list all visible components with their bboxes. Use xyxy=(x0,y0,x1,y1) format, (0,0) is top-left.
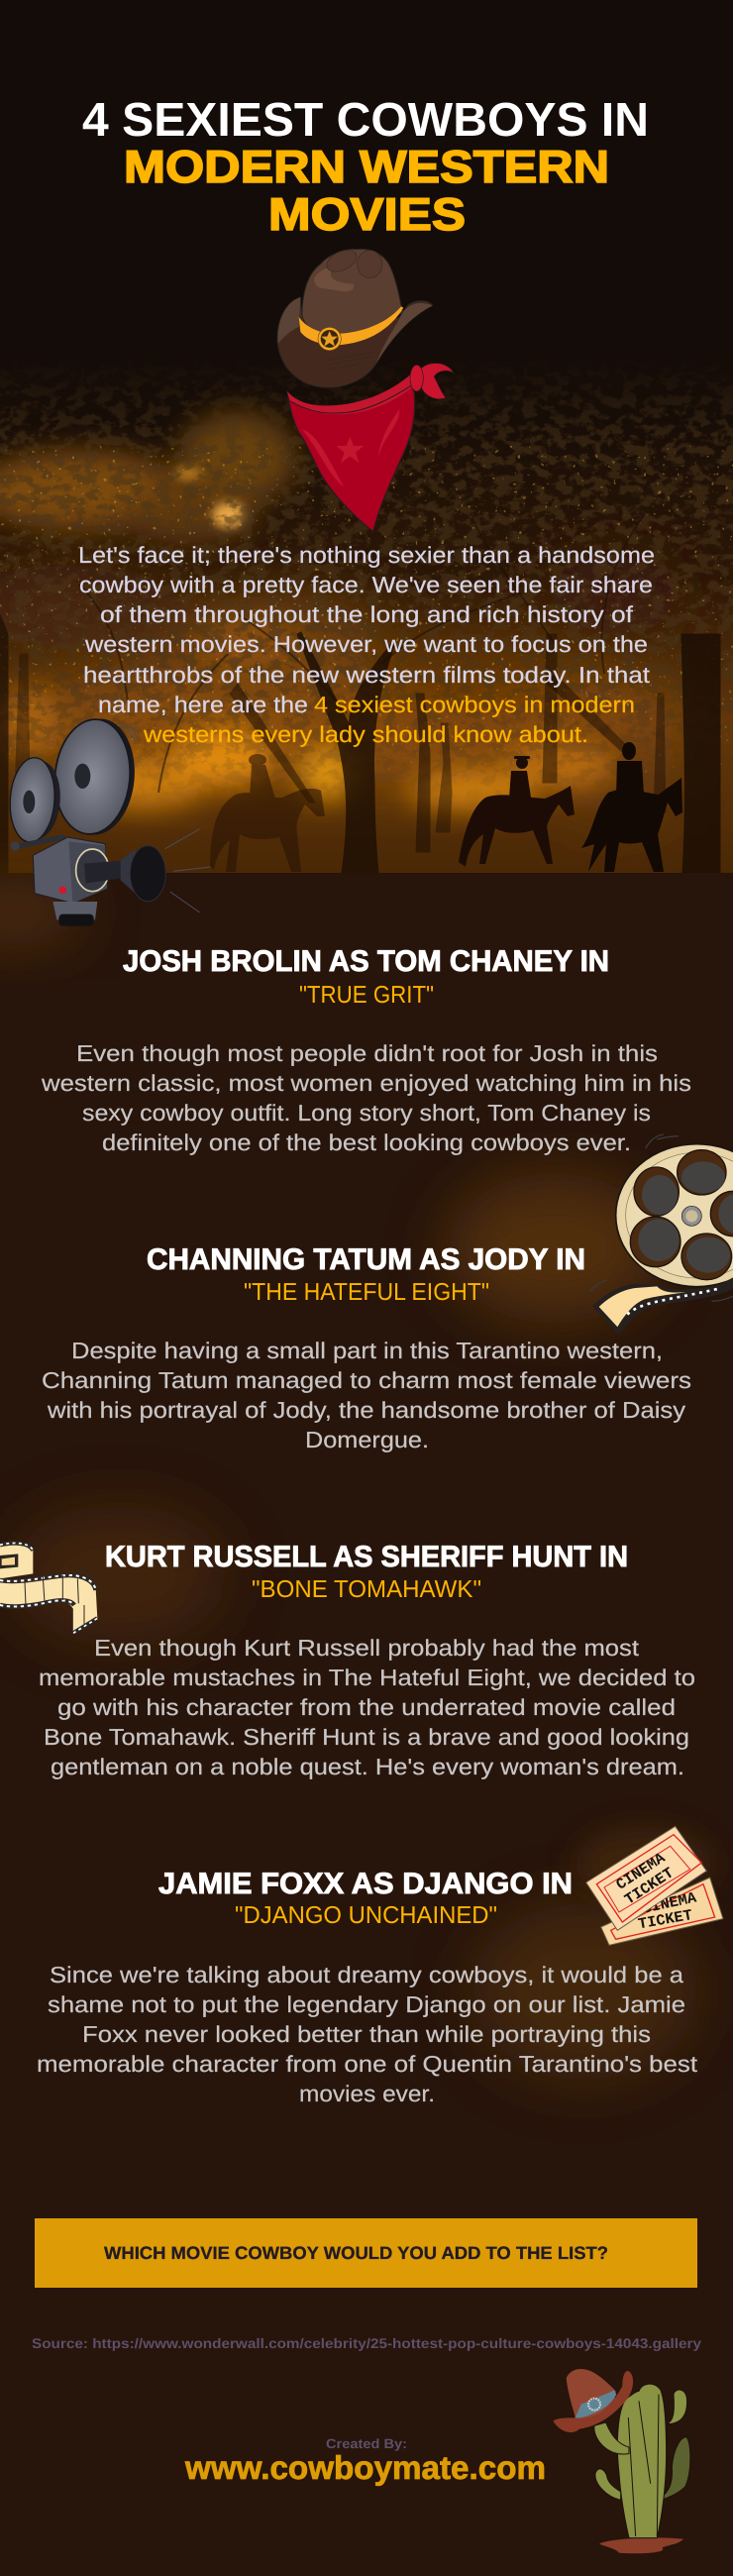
section: Channing Tatum xyxy=(42,1243,691,1452)
body text: memorable character from one of Quentin Tarantino's best xyxy=(37,2051,698,2077)
movie title: "THE HATEFUL EIGHT" xyxy=(244,1279,489,1306)
icon: film strip xyxy=(0,1543,97,1633)
horse and rider, foreground xyxy=(581,742,682,872)
body text: gentleman on a noble quest. He's every woman's dream. xyxy=(51,1754,684,1779)
intro paragraph: cowboy with a pretty face. We've seen the fair share xyxy=(79,572,653,597)
heading: JOSH BROLIN AS TOM CHANEY IN xyxy=(123,945,609,978)
body text: movies ever. xyxy=(299,2081,435,2106)
section: Kurt Russell xyxy=(39,1541,695,1779)
heading: KURT RUSSELL AS SHERIFF HUNT IN xyxy=(105,1541,628,1573)
front ticket xyxy=(586,1826,706,1930)
section: Josh Brolin xyxy=(41,945,691,1155)
intro paragraph xyxy=(78,542,655,747)
body text: Domergue. xyxy=(305,1427,429,1452)
title: MOVIES xyxy=(268,188,466,240)
intro paragraph: heartthrobs of the new western films today. In that xyxy=(83,662,651,688)
intro paragraph: Let's face it; there's nothing sexier than a handsome xyxy=(78,542,655,568)
body text xyxy=(41,1040,691,1155)
body text: Foxx never looked better than while portraying this xyxy=(82,2021,651,2047)
body text: memorable mustaches in The Hateful Eight, we decided to xyxy=(39,1664,695,1690)
body text: Despite having a small part in this Tarantino western, xyxy=(71,1338,663,1363)
icon: film reel xyxy=(589,1134,733,1335)
section background below hero xyxy=(0,873,733,2576)
body text: Even though most people didn't root for Josh in this xyxy=(76,1040,658,1066)
intro paragraph: westerns every lady should know about. xyxy=(143,721,588,747)
horse and rider, faint xyxy=(210,754,325,872)
title xyxy=(82,94,649,240)
heading: CHANNING TATUM AS JODY IN xyxy=(147,1243,585,1276)
body text: shame not to put the legendary Django on our list. Jamie xyxy=(48,1991,685,2017)
body text: definitely one of the best looking cowboys ever. xyxy=(102,1129,631,1155)
body text: Even though Kurt Russell probably had the most xyxy=(94,1635,640,1661)
body text xyxy=(37,1962,698,2106)
back ticket xyxy=(601,1878,723,1945)
body text xyxy=(39,1635,695,1779)
intro paragraph: name, here are the xyxy=(98,692,308,717)
top dark band xyxy=(0,0,733,357)
call to action banner xyxy=(35,2218,697,2288)
icon: film camera xyxy=(7,715,211,926)
body text: western classic, most women enjoyed watching him in his xyxy=(41,1070,691,1096)
call to action banner: WHICH MOVIE COWBOY WOULD YOU ADD TO THE LIST? xyxy=(104,2243,608,2263)
credit: www.cowboymate.com xyxy=(184,2449,546,2486)
back ticket: CINEMA xyxy=(641,1889,698,1917)
movie title: "TRUE GRIT" xyxy=(299,982,434,1009)
body text: Channing Tatum managed to charm most female viewers xyxy=(42,1367,691,1393)
body text: sexy cowboy outfit. Long story short, Tom Chaney is xyxy=(82,1100,651,1126)
back ticket: TICKET xyxy=(637,1906,693,1933)
source line: Source: https://www.wonderwall.com/celebrity/25-hottest-pop-culture-cowboys-14043.gallery xyxy=(32,2335,701,2351)
body text: Since we're talking about dreamy cowboys, it would be a xyxy=(50,1962,683,1987)
body text: with his portrayal of Jody, the handsome brother of Daisy xyxy=(47,1397,686,1423)
movie title: "BONE TOMAHAWK" xyxy=(252,1576,481,1603)
intro paragraph: of them throughout the long and rich history of xyxy=(100,601,634,627)
body text: Bone Tomahawk. Sheriff Hunt is a brave and good looking xyxy=(44,1724,689,1750)
hero: burning forest scene xyxy=(0,337,733,873)
icon: cowboy hat and red bandana xyxy=(277,246,454,532)
heading: JAMIE FOXX AS DJANGO IN xyxy=(158,1868,573,1900)
title: 4 SEXIEST COWBOYS IN xyxy=(82,94,649,147)
title: MODERN WESTERN xyxy=(124,141,609,192)
cactus xyxy=(594,2384,690,2538)
icon: cinema tickets xyxy=(586,1826,723,1945)
brown smoke clouds behind sections xyxy=(0,877,713,2081)
credit: Created By: xyxy=(326,2436,407,2451)
dirt xyxy=(599,2537,683,2553)
body text: go with his character from the underrated movie called xyxy=(57,1694,676,1720)
icon: cowboy hat xyxy=(277,246,433,387)
intro paragraph: western movies. However, we want to focus on the xyxy=(84,631,648,657)
body text xyxy=(42,1338,691,1452)
hat on cactus xyxy=(553,2369,633,2432)
icon: red bandana xyxy=(287,364,454,532)
front ticket: TICKET xyxy=(622,1865,677,1908)
tree silhouettes xyxy=(0,515,720,873)
front ticket: CINEMA xyxy=(613,1850,669,1893)
movie title: "DJANGO UNCHAINED" xyxy=(235,1902,497,1929)
horse and rider xyxy=(459,756,575,867)
intro paragraph: 4 sexiest cowboys in modern xyxy=(314,692,635,717)
icon: cactus with cowboy hat xyxy=(553,2369,690,2553)
section: Jamie Foxx xyxy=(37,1868,698,2106)
